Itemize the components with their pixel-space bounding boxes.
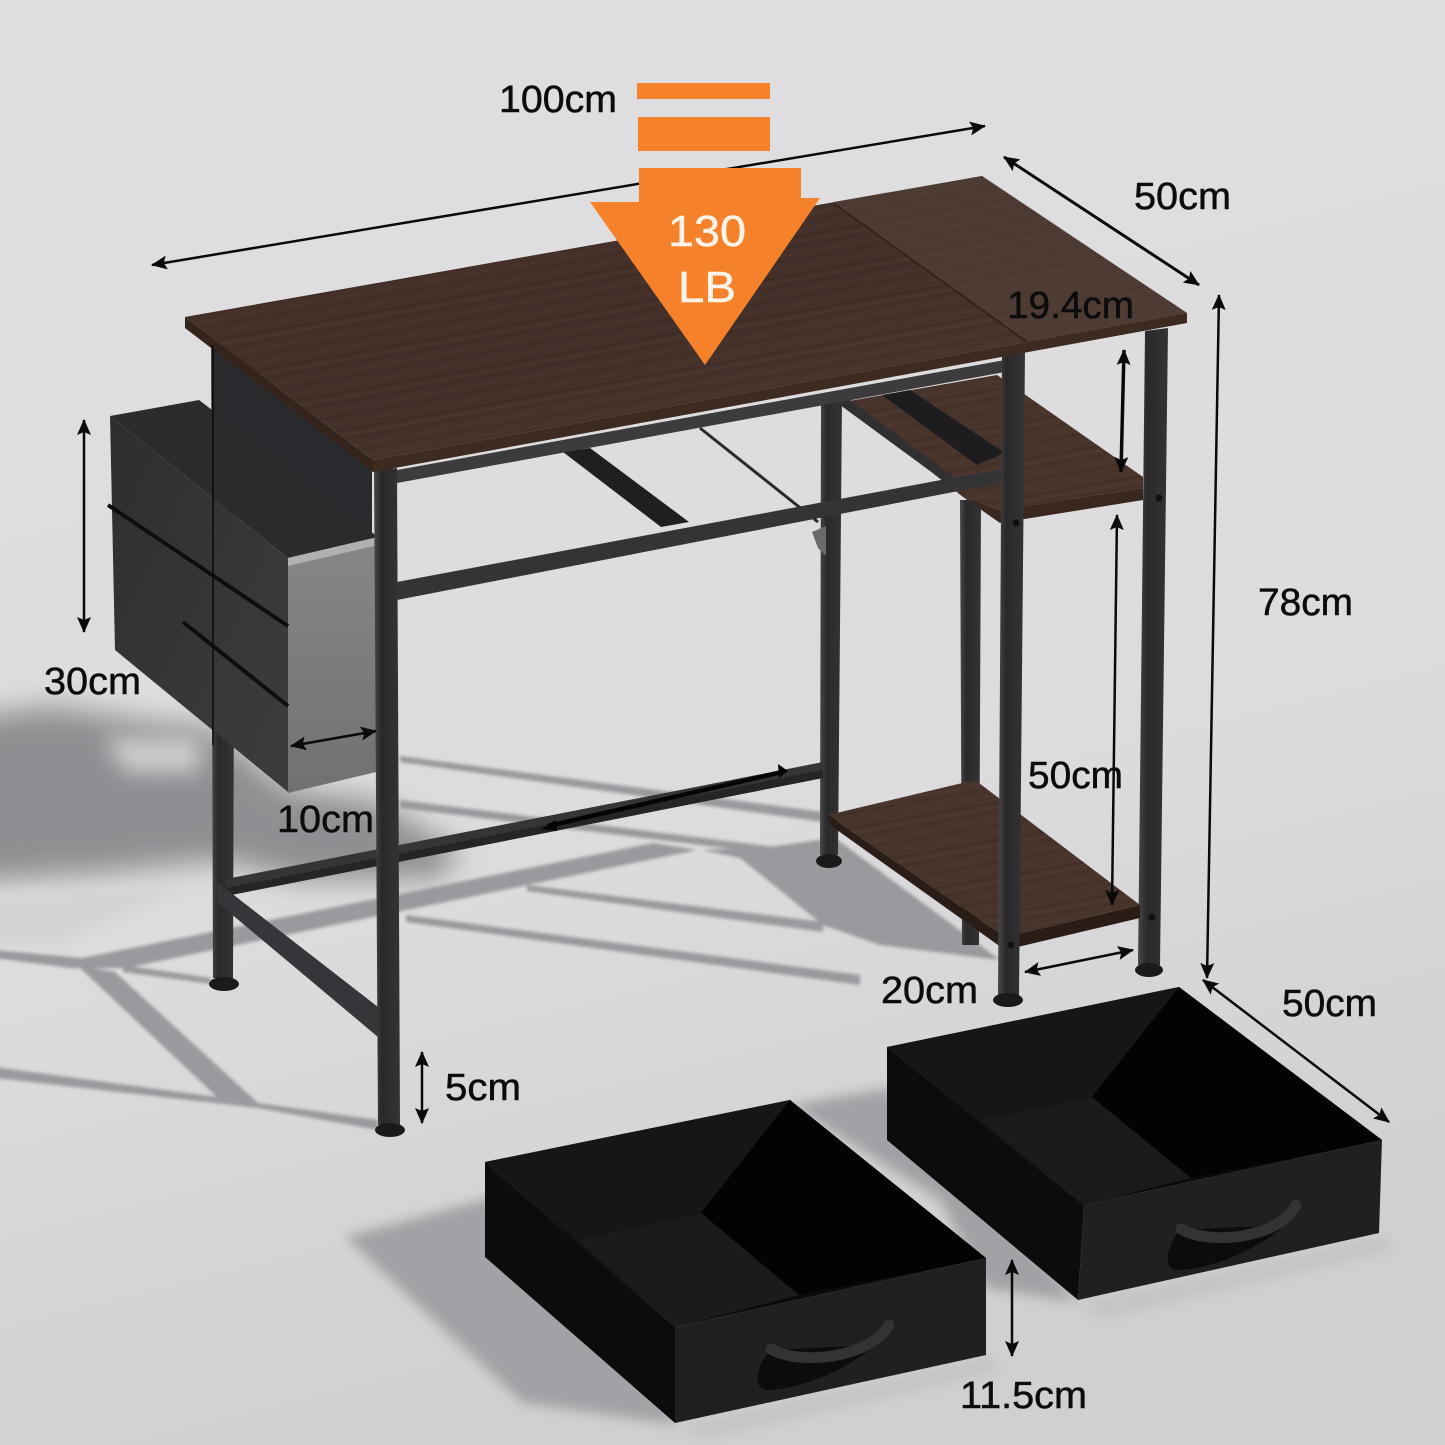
handle rope xyxy=(1181,1205,1296,1238)
label: 19.4cm: 19.4cm xyxy=(1007,285,1134,327)
top surface xyxy=(185,176,1187,460)
handle shadow xyxy=(1168,1225,1285,1270)
label: 50cm depth: 50cm xyxy=(1134,176,1231,218)
right drawer xyxy=(887,987,1382,1300)
label: 50cm drawer: 50cm xyxy=(1282,983,1377,1025)
left edge xyxy=(185,317,373,472)
tall right leg xyxy=(1135,328,1168,977)
arrow: 50cm drawer xyxy=(1203,980,1389,1122)
under-desk bars xyxy=(563,390,1005,556)
front right leg xyxy=(993,350,1025,1007)
seam xyxy=(833,203,1027,342)
upper shelf xyxy=(836,375,1143,523)
label: 78cm: 78cm xyxy=(1258,582,1353,624)
label: 5cm: 5cm xyxy=(445,1067,521,1109)
arrow: 11.5cm drawer xyxy=(1011,1260,1013,1356)
label: 100cm: 100cm xyxy=(499,79,617,121)
label: 50cm inner: 50cm xyxy=(1028,755,1123,797)
straps xyxy=(108,505,288,706)
desktop xyxy=(185,176,1187,472)
label: 10cm: 10cm xyxy=(277,799,374,841)
bag interior xyxy=(110,400,378,558)
side bottom rail xyxy=(217,882,378,1037)
bottom rail with arrow xyxy=(226,762,823,896)
bottom shelf xyxy=(828,780,1140,950)
label: 11.5cm: 11.5cm xyxy=(960,1375,1087,1417)
front left leg xyxy=(374,468,405,1137)
side board xyxy=(212,345,372,540)
arrow: 10cm bag xyxy=(291,731,376,746)
front rail xyxy=(397,360,1005,600)
weight arrow xyxy=(590,83,820,365)
mid back leg xyxy=(816,400,842,868)
handle rope xyxy=(771,1325,889,1358)
dimension arrows xyxy=(84,126,1389,1356)
hanging storage bag xyxy=(108,345,378,793)
arrow: 100cm width xyxy=(152,126,985,265)
arrow: 50cm inner xyxy=(1112,515,1117,905)
bag end panel xyxy=(288,537,378,793)
label: 30cm: 30cm xyxy=(44,661,141,703)
handle shadow xyxy=(758,1345,875,1390)
right panel tint xyxy=(833,176,1187,342)
left drawer xyxy=(485,1100,986,1423)
bag front face xyxy=(110,416,288,792)
back left leg xyxy=(209,345,239,991)
weight label: 130 xyxy=(668,207,746,256)
thin line on bag xyxy=(212,345,214,745)
arrow: 50cm depth xyxy=(1004,157,1199,285)
arrow: 19.4cm gap xyxy=(1121,350,1124,472)
front edge xyxy=(373,313,1187,472)
label: 20cm: 20cm xyxy=(881,970,978,1012)
floor shadows xyxy=(0,706,1395,1440)
inner right leg xyxy=(960,500,981,945)
arrow: 5cm foot xyxy=(421,1052,423,1123)
arrow: 78cm height xyxy=(1207,295,1219,978)
arrow: 20cm shelf xyxy=(1025,950,1133,972)
weight arrow: LB xyxy=(678,263,736,312)
arrow: 30cm bag xyxy=(83,420,85,632)
